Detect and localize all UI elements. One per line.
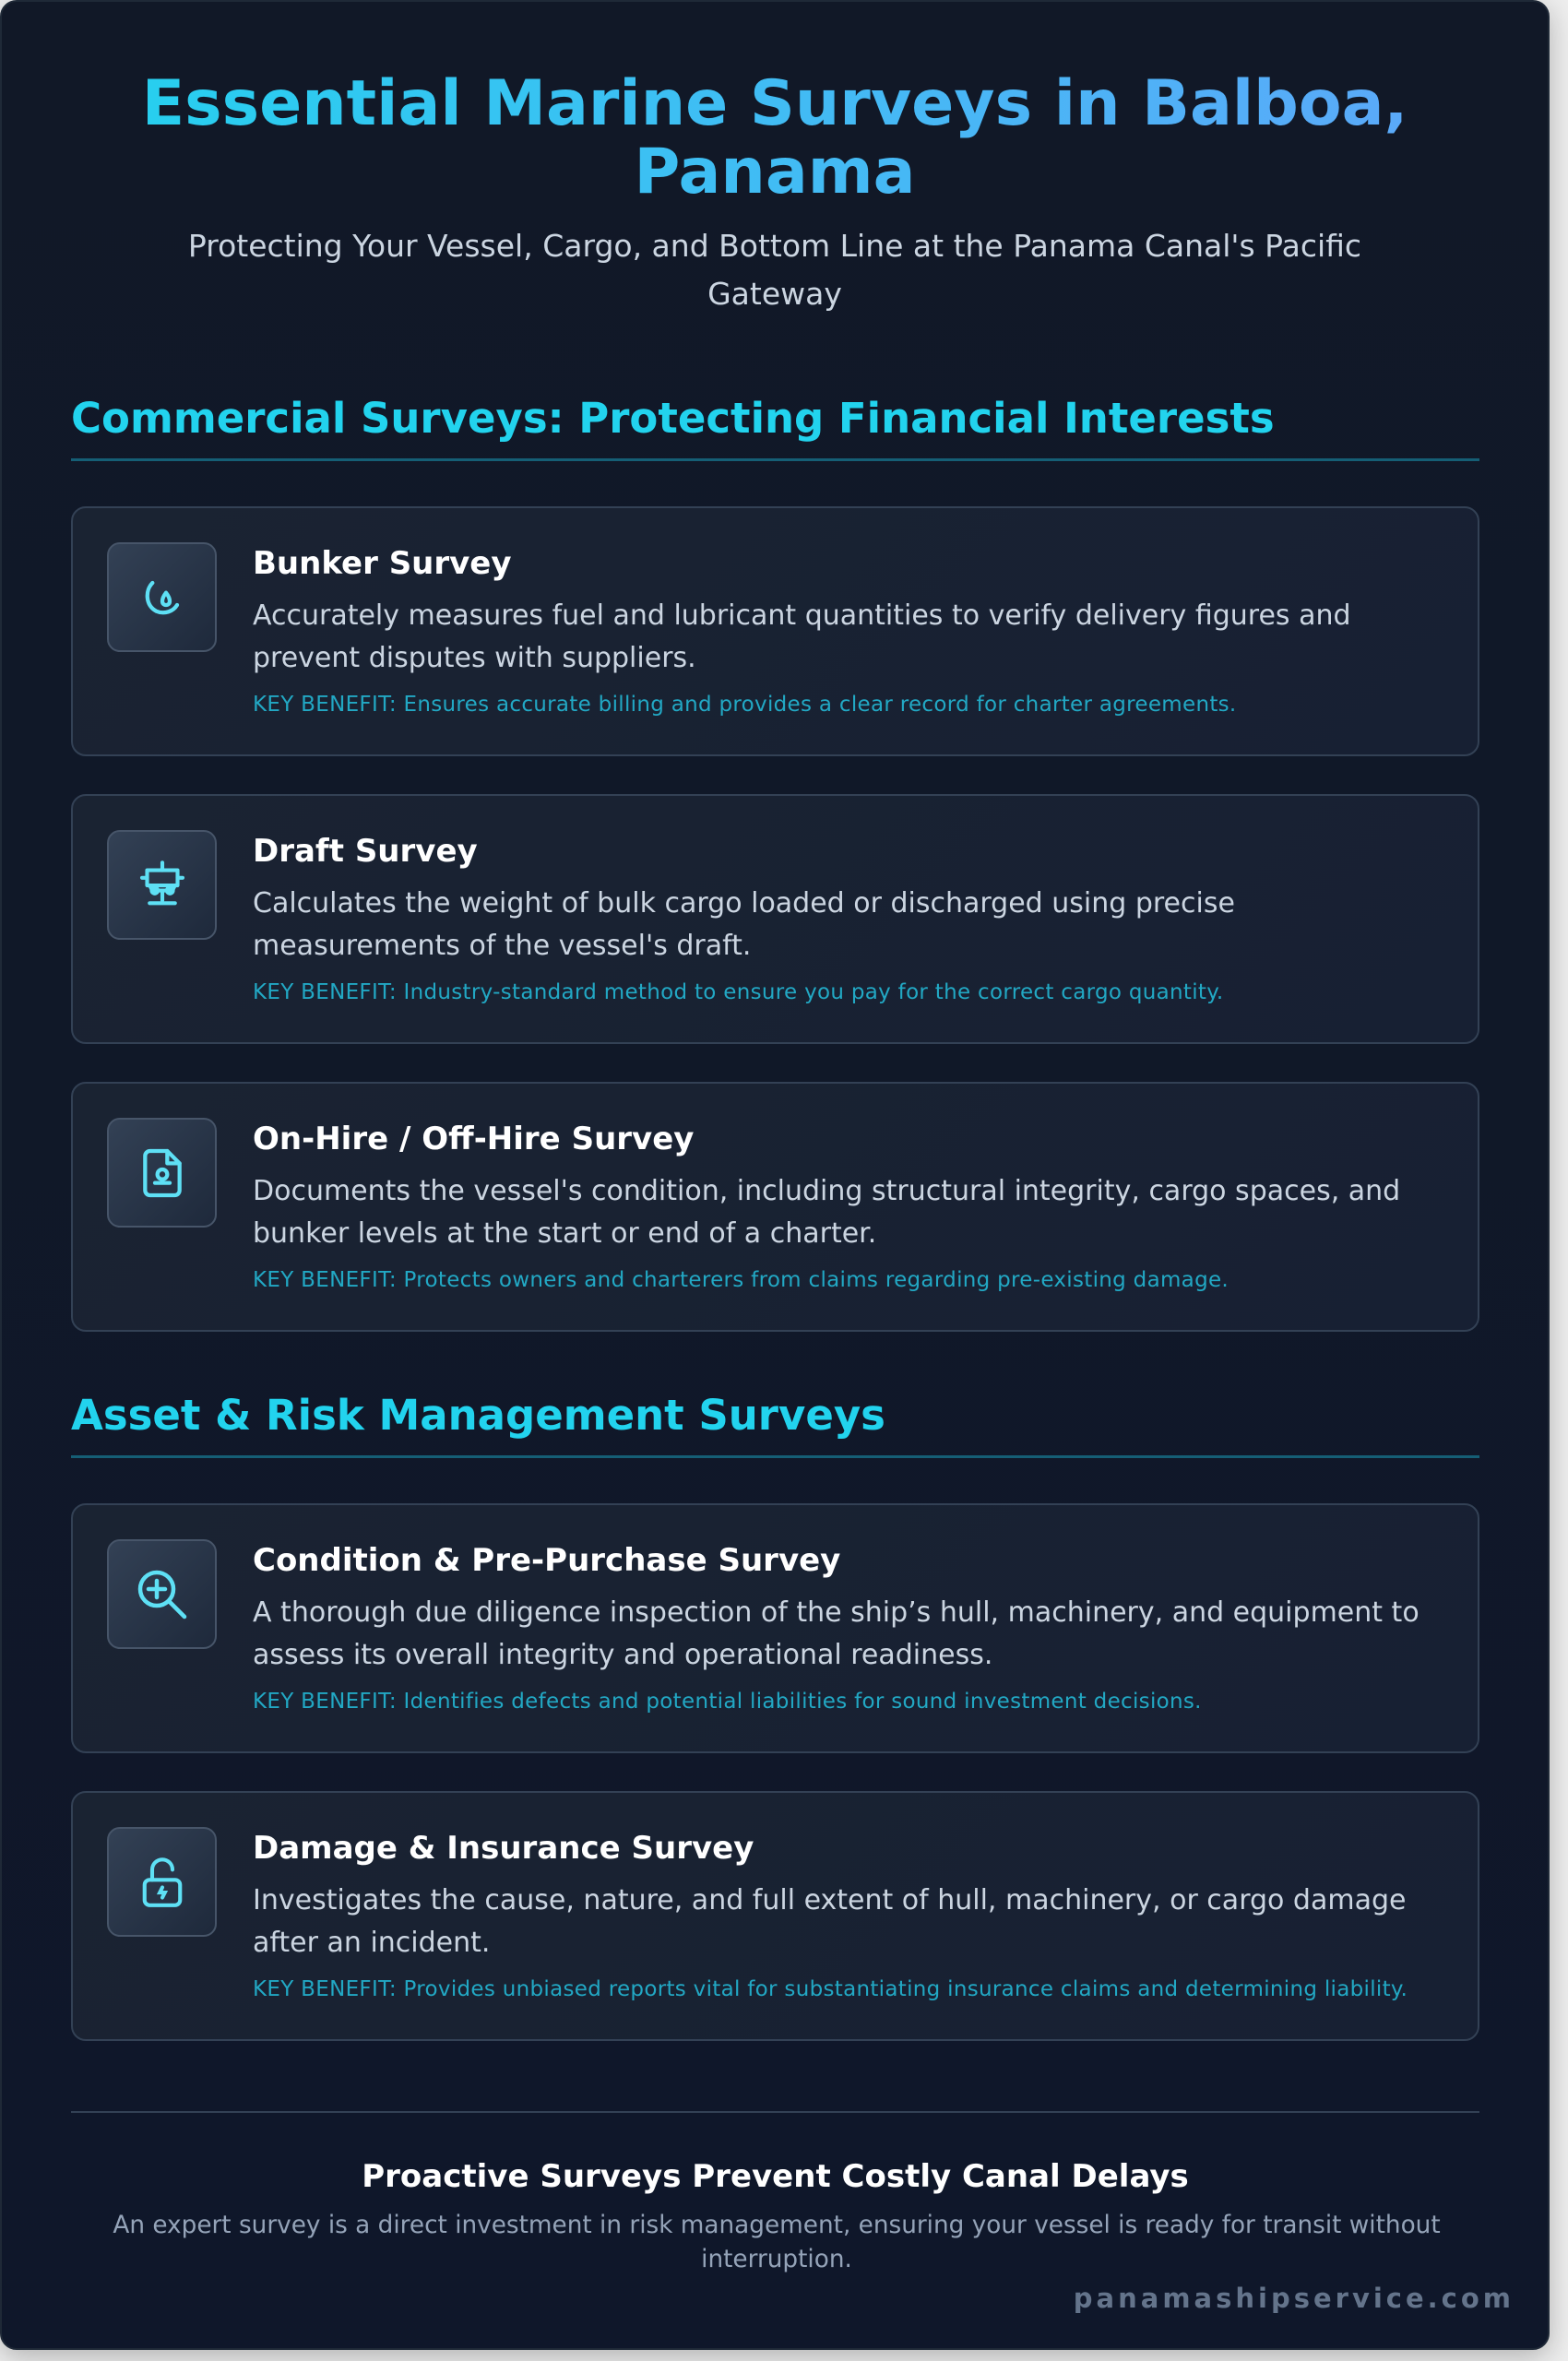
card: bunker survey [71,506,1479,756]
watermark: panamashipservice.com [1074,2283,1515,2314]
card: condition and pre-purchase [71,1503,1479,1753]
text: draft survey [253,833,1235,1004]
text: condition survey: KEY BENEFIT: Identifies defects and potential liabilities for sound investment decisions. [253,1690,1202,1714]
icon: ship [107,830,217,940]
text: damage survey: KEY BENEFIT: Provides unbiased reports vital for substantiating insurance claims and determining liability. [253,1977,1408,2001]
card: draft survey [71,794,1479,1044]
icon: lock [107,1827,217,1937]
text: bunker survey: Accurately measures fuel and lubricant quantities to verify delivery figures and prevent disputes with suppliers. [253,599,1351,674]
title: Panama [635,136,915,208]
section heading: asset and risk: Asset & Risk Management Surveys [71,1391,885,1440]
icon: magnifier [107,1539,217,1649]
text: draft survey: Calculates the weight of bulk cargo loaded or discharged using precise measurements of the vessel's draft. [253,887,1235,962]
text: on-hire survey: On-Hire / Off-Hire Survey [253,1121,694,1157]
title [2,70,1548,207]
text: draft survey: KEY BENEFIT: Industry-standard method to ensure you pay for the correct cargo quantity. [253,980,1223,1004]
title: Essential Marine Surveys in Balboa, [142,67,1408,140]
footer text: An expert survey is a direct investment in risk management, ensuring your vessel is ready for transit without interruption. [113,2212,1441,2273]
text: draft survey: Draft Survey [253,833,478,870]
text: damage survey [253,1830,1408,2001]
text: bunker survey [253,545,1351,717]
card: damage and insurance [71,1791,1479,2041]
text: condition survey: Condition & Pre-Purchase Survey [253,1542,840,1579]
text: bunker survey: Bunker Survey [253,545,512,582]
footer heading: Proactive Surveys Prevent Costly Canal Delays [362,2158,1189,2195]
card: on-hire off-hire survey [71,1082,1479,1332]
icon: fuel drop [107,542,217,652]
text: bunker survey: KEY BENEFIT: Ensures accurate billing and provides a clear record for charter agreements. [253,693,1237,717]
icon: document [107,1118,217,1228]
text: on-hire survey [253,1121,1400,1292]
text: condition survey: A thorough due diligence inspection of the ship’s hull, machinery, and equipment to assess its overall integrity and operational readiness. [253,1596,1420,1671]
subtitle: Protecting Your Vessel, Cargo, and Bottom Line at the Panama Canal's Pacific Gateway [188,228,1361,312]
section heading: commercial surveys [71,396,1479,461]
text: damage survey: Investigates the cause, nature, and full extent of hull, machinery, or cargo damage after an incident. [253,1884,1406,1959]
text: condition survey [253,1542,1420,1714]
text: on-hire survey: KEY BENEFIT: Protects owners and charterers from claims regarding pre-existing damage. [253,1268,1229,1292]
text: damage survey: Damage & Insurance Survey [253,1830,754,1867]
section heading: asset and risk [71,1393,1479,1458]
section heading: commercial surveys: Commercial Surveys: Protecting Financial Interests [71,394,1275,443]
text: on-hire survey: Documents the vessel's condition, including structural integrity, cargo spaces, and bunker levels at the start or end of a charter. [253,1175,1400,1250]
